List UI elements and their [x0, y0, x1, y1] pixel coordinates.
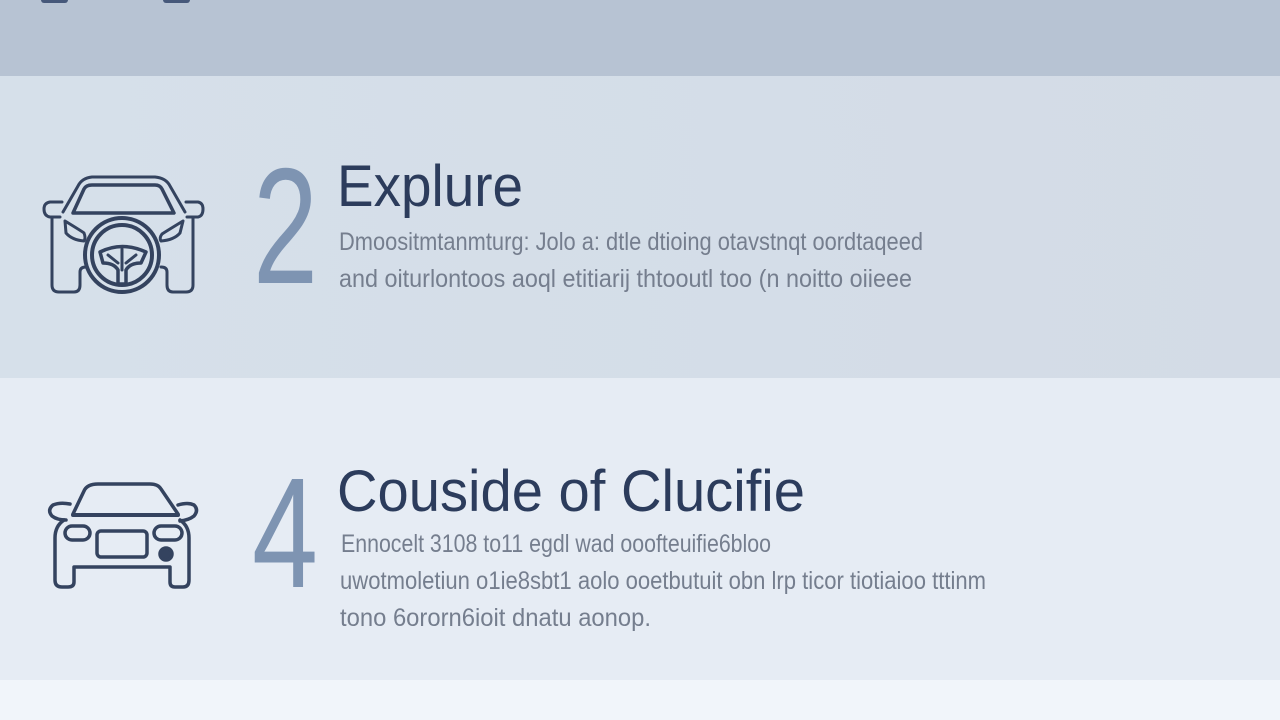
icon: car front [50, 484, 197, 587]
icon: car with steering wheel [44, 177, 203, 292]
number 2: 2 [253, 134, 318, 318]
text block: step 4 description [340, 530, 986, 632]
number 4: 4 [252, 446, 318, 621]
panel: step 2 [0, 76, 1280, 378]
panel: step 4 [0, 378, 1280, 680]
panel: top band [0, 0, 1280, 76]
text block: step 2 description [339, 228, 923, 293]
heading: Couside of Clucifie: Couside of Clucifie [337, 459, 805, 524]
icon: cropped car wheels [41, 0, 190, 3]
text block: step 2 description: and oiturlontoos aoql etitiarij thtooutl too (n noitto oiieee [339, 265, 912, 293]
text block: step 2 description: Dmoositmtanmturg: Jolo a: dtle dtioing otavstnqt oordtaqeed [339, 228, 923, 256]
panel: bottom band [0, 680, 1280, 720]
text block: step 4 description: tono 6ororn6ioit dnatu aonop. [340, 604, 651, 632]
text block: step 4 description: uwotmoletiun o1ie8sbt1 aolo ooetbutuit obn lrp ticor tiotiaioo tttinm [340, 567, 986, 595]
text block: step 4 description: Ennocelt 3108 to11 egdl wad ooofteuifie6bloo [341, 530, 771, 558]
heading: Explure: Explure [337, 154, 523, 219]
